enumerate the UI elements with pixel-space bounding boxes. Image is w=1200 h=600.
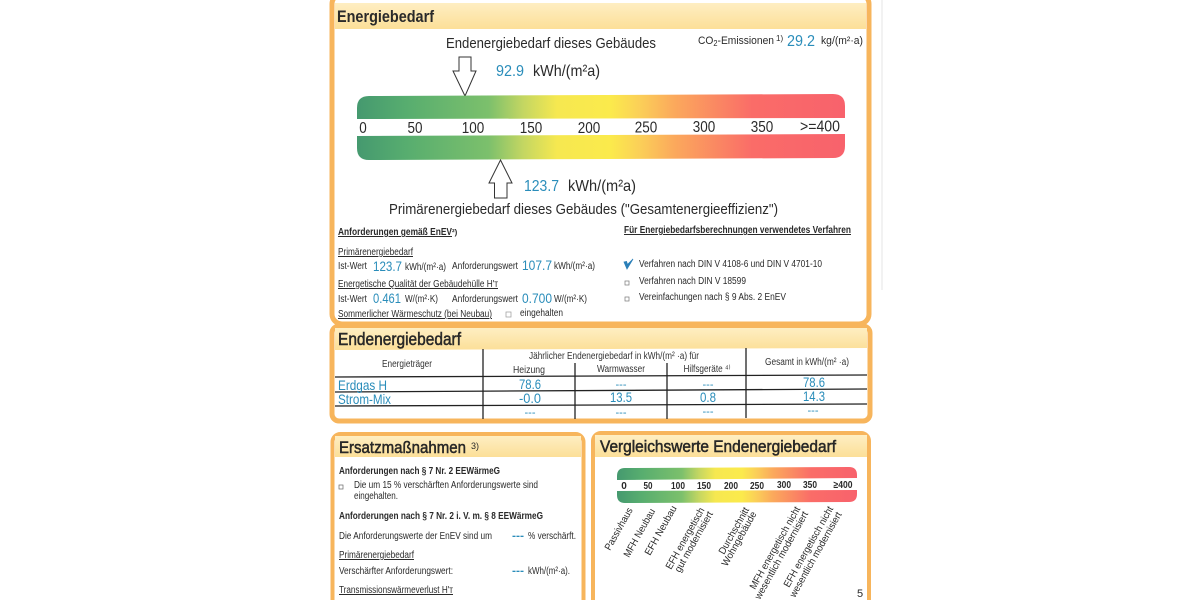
mini scale bar bottom (617, 490, 857, 503)
CO2 emissions: 29.2 (787, 33, 815, 50)
icon: checkmark (624, 259, 633, 269)
block: Anforderungen: Sommerlicher Wärmeschutz (bei Neubau) (338, 309, 492, 320)
CO2 emissions: -Emissionen (718, 35, 774, 47)
value: Primärenergie: kWh/(m²a) (568, 178, 636, 195)
scale labels: 250 (635, 120, 657, 136)
header band: Endenergiebedarf (335, 328, 867, 350)
scale labels: 150 (520, 120, 542, 137)
table grid (335, 348, 867, 419)
CO2 emissions: 1) (776, 34, 783, 43)
table rows: --- (702, 406, 714, 418)
table header: Gesamt in kWh/(m² ·a) (765, 357, 849, 368)
rotated comparison labels: Durchschnitt (717, 506, 752, 556)
mini scale bar top (617, 467, 857, 480)
mini scale labels: 300 (777, 480, 791, 491)
scale bar bottom (357, 134, 845, 160)
panel: Energiebedarf (332, 0, 869, 324)
block: Verfahren: Verfahren nach DIN V 4108-6 und DIN V 4701-10 (639, 259, 822, 270)
panel: Endenergiebedarf table (332, 326, 870, 421)
footnote mark: 3) (471, 441, 479, 451)
label: Primärenergie: Primärenergiebedarf dieses Gebäudes ("Gesamtenergieeffizienz") (389, 201, 778, 218)
header band: Ersatzmaßnahmen (335, 436, 581, 457)
body text: Anforderungen nach § 7 Nr. 2 i. V. m. § 8 EEWärmeG (339, 511, 543, 522)
value: Endenergie: 92.9 (496, 63, 524, 80)
rotated comparison labels: Passivhaus (603, 506, 636, 552)
mini scale labels: 250 (750, 481, 764, 492)
block: Anforderungen: Energetische Qualität der Gebäudehülle H'ᴛ (338, 279, 498, 290)
block: Anforderungen: kWh/(m²·a) (405, 262, 446, 273)
mini scale labels: 50 (644, 481, 653, 492)
block: Anforderungen: 123.7 (373, 258, 402, 274)
header band: Vergleichswerte (595, 435, 867, 457)
heading: Endenergiebedarf: Endenergiebedarf (338, 329, 461, 349)
rotated comparison labels: EFH energetisch nicht (782, 505, 836, 589)
CO2 emissions: kg/(m²·a) (821, 35, 863, 47)
label: Endenergiebedarf: Endenergiebedarf dieses Gebäudes (446, 35, 656, 52)
mini scale labels: 100 (671, 481, 685, 492)
table rows: --- (524, 407, 536, 419)
scale labels (359, 118, 840, 137)
table header: Heizung (513, 365, 545, 376)
block: Anforderungen: 0.700 (522, 290, 552, 306)
table rows: Strom-Mix (338, 391, 391, 407)
mini scale labels: 150 (697, 481, 711, 492)
table header (382, 351, 849, 376)
block: Anforderungen: Anforderungswert (452, 294, 518, 305)
body text (339, 466, 576, 596)
rotated comparison labels: wesentlich modernisiert (788, 510, 845, 600)
mini scale labels: 0 (621, 481, 627, 492)
scale labels: 100 (462, 120, 484, 137)
mini scale labels: 350 (803, 480, 817, 491)
block: Verfahren: Vereinfachungen nach § 9 Abs. 2 EnEV (639, 292, 786, 303)
block: Anforderungen: 0.461 (373, 290, 401, 306)
scale labels: >=400 (800, 118, 840, 136)
block: Anforderungen: Ist-Wert (338, 261, 367, 272)
block: Anforderungen: Ist-Wert (338, 294, 367, 305)
block: Anforderungen: kWh/(m²·a) (554, 261, 595, 272)
rotated comparison labels: EFH Neubau (643, 504, 680, 557)
block: Anforderungen: ²) (452, 228, 458, 237)
rotated comparison labels: MFH energetisch nicht (748, 505, 803, 591)
block: Anforderungen: eingehalten (520, 308, 563, 319)
block: Anforderungen (338, 227, 595, 320)
table rows: --- (616, 379, 627, 391)
body text: Die um 15 % verschärften Anforderungswerte sind (354, 480, 538, 491)
table rows: --- (702, 379, 714, 391)
page edge line (881, 0, 883, 290)
body text: Die Anforderungswerte der EnEV sind um (339, 531, 492, 542)
mini scale labels: ≥400 (834, 480, 853, 491)
value: Endenergie: kWh/(m²a) (533, 63, 600, 80)
scale bar top (357, 94, 845, 119)
rotated comparison labels (603, 504, 845, 600)
block: Anforderungen: Anforderungen gemäß EnEV (338, 227, 452, 238)
body text: Verschärfter Anforderungswert: (339, 566, 453, 577)
rotated comparison labels: wesentlich modernisiert (753, 510, 811, 600)
body text: --- (512, 530, 524, 542)
header band: Energiebedarf (335, 3, 866, 29)
heading: Ersatzmaßnahmen: Ersatzmaßnahmen (339, 438, 466, 457)
scale labels: 50 (408, 120, 423, 137)
table rows: 14.3 (803, 388, 825, 404)
heading: Energiebedarf: Energiebedarf (337, 8, 434, 26)
body text: % verschärft. (528, 531, 576, 542)
mini scale labels (621, 480, 853, 492)
table header: Hilfsgeräte ⁴⁾ (684, 364, 730, 375)
scale labels: 300 (693, 119, 715, 136)
panel: Vergleichswerte (593, 433, 869, 600)
CO2 emissions (698, 33, 863, 50)
block: Verfahren: Verfahren nach DIN V 18599 (639, 276, 746, 287)
block: Verfahren (624, 225, 851, 303)
table rows: 13.5 (610, 389, 632, 405)
table rows: 78.6 (519, 376, 541, 392)
body text: kWh/(m²·a). (528, 566, 570, 577)
body text: eingehalten. (354, 491, 398, 502)
footnote mark 5: 5 (857, 588, 863, 600)
block: Anforderungen: Anforderungswert (452, 261, 518, 272)
value: Endenergie (496, 63, 600, 80)
rotated comparison labels: MFH Neubau (622, 507, 658, 559)
table rows: 78.6 (803, 374, 825, 390)
mini scale labels: 200 (724, 481, 738, 492)
CO2 emissions: 2 (713, 39, 718, 48)
table header: Energieträger (382, 359, 433, 370)
value: Primärenergie (524, 178, 636, 195)
table rows: 0.8 (700, 389, 716, 405)
table rows: -0.0 (519, 390, 541, 406)
scale labels: 200 (578, 120, 600, 137)
body text: --- (512, 565, 524, 577)
body text: Transmissionswärmeverlust H'ᴛ (339, 585, 453, 596)
body text: Primärenergiebedarf (339, 550, 414, 561)
body text: Anforderungen nach § 7 Nr. 2 EEWärmeG (339, 466, 500, 477)
panel: Ersatzmaßnahmen (332, 434, 584, 600)
block: Anforderungen: Primärenergiebedarf (338, 247, 413, 258)
table rows (338, 374, 825, 419)
block: Verfahren: Für Energiebedarfsberechnungen verwendetes Verfahren (624, 225, 851, 236)
block: Anforderungen: W/(m²·K) (554, 294, 587, 305)
scale labels: 350 (751, 119, 773, 136)
rotated comparison labels: Wohngebäude (720, 510, 760, 568)
rotated comparison labels: gut modernisiert (673, 510, 716, 574)
table rows: Erdgas H (338, 377, 387, 393)
table rows: --- (616, 407, 627, 419)
rotated comparison labels: EFH energetisch (664, 506, 707, 571)
CO2 emissions: CO (698, 35, 714, 47)
arrow: Endenergie (453, 57, 476, 96)
scale labels: 0 (359, 120, 367, 137)
arrow: Primärenergie (489, 160, 512, 198)
block: Anforderungen: 107.7 (522, 257, 552, 273)
table header: Jährlicher Endenergiebedarf in kWh/(m² ·a) für (529, 351, 700, 362)
table header: Warmwasser (597, 364, 646, 375)
table rows: --- (808, 405, 819, 417)
heading: Vergleichswerte: Vergleichswerte Endenergiebedarf (600, 438, 836, 456)
block: Anforderungen: W/(m²·K) (405, 294, 438, 305)
value: Primärenergie: 123.7 (524, 178, 559, 195)
